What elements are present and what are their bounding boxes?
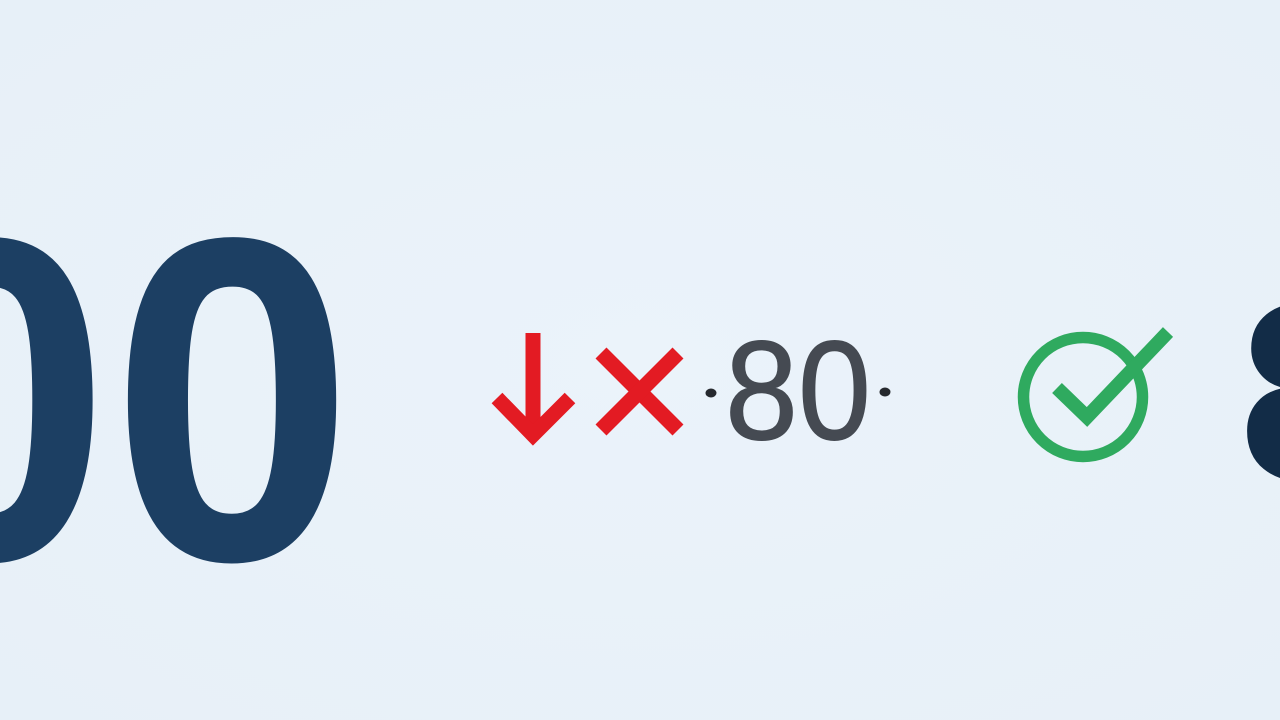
value: 80 with dots: 80 <box>725 311 871 469</box>
icon: red down arrow <box>497 333 570 435</box>
icon: green check in circle <box>1024 332 1168 456</box>
icon: red cross <box>601 353 678 430</box>
